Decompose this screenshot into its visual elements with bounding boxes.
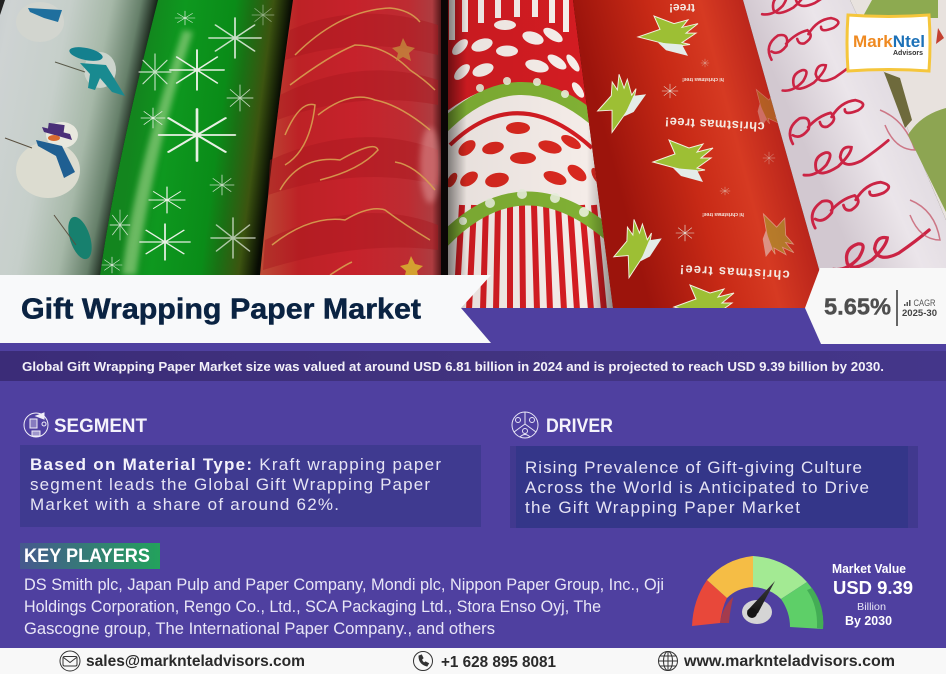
hero photo: rolls of wrapping paper (0, 0, 946, 327)
key players list (24, 576, 664, 638)
driver text box (510, 446, 918, 528)
purple background panel (0, 308, 946, 648)
icon: phone (414, 652, 432, 670)
icon: driver (512, 412, 538, 438)
key players list: Gascogne group, The International Paper Company., and others (24, 620, 495, 638)
segment text box: segment leads the Global Gift Wrapping Paper (30, 475, 430, 494)
CAGR panel (805, 268, 946, 344)
key players list: Holdings Corporation, Rengo Co., Ltd., SCA Packaging Ltd., Stora Enso Oyj, The (24, 598, 601, 616)
title: Gift Wrapping Paper Market (21, 294, 421, 326)
driver heading: DRIVER (546, 416, 613, 437)
roll: green snowflake paper (100, 0, 292, 275)
driver text box: Across the World is Anticipated to Drive (525, 478, 869, 497)
roll: red christmas tree paper: christmas tree! (664, 114, 765, 135)
footer contact bar (0, 648, 946, 674)
gauge needle (747, 581, 775, 618)
phone number: +1 628 895 8081 (441, 654, 556, 671)
gauge chart (692, 556, 823, 629)
key players badge: KEY PLAYERS (24, 546, 150, 567)
icon: small bar chart (904, 300, 910, 306)
icon: segment (24, 413, 48, 437)
CAGR value: 5.65% (824, 294, 891, 320)
icon: globe (658, 652, 678, 670)
roll: red christmas tree paper: christmas tree! (679, 262, 790, 283)
segment heading: SEGMENT (54, 416, 147, 437)
driver text box: the Gift Wrapping Paper Market (525, 498, 800, 517)
CAGR period: 2025-30 (902, 308, 937, 318)
logo: MarkNtel Advisors: MarkNtel (853, 32, 925, 51)
market value: By 2030 (845, 614, 892, 628)
panel: key players (20, 543, 664, 638)
panel: segment (20, 413, 481, 527)
roll: red christmas tree paper: hi christmas tree! (682, 76, 724, 82)
icon: email (60, 651, 80, 671)
roll: green and white paper at right edge (850, 0, 946, 220)
driver text box: Rising Prevalence of Gift-giving Culture (525, 458, 862, 477)
roll: silver snowman paper (0, 0, 158, 310)
key players list: DS Smith plc, Japan Pulp and Paper Company, Mondi plc, Nippon Paper Group, Inc., Oji (24, 576, 664, 594)
summary band (0, 351, 946, 381)
market value: Market Value (832, 562, 906, 576)
logo: MarkNtel Advisors: Advisors (893, 48, 923, 57)
summary band: Global Gift Wrapping Paper Market size was valued at around USD 6.81 billion in 2024 and is projected to reach USD 9.39 billion by 2030. (22, 360, 884, 374)
segment text box: Based on Material Type: Kraft wrapping paper (30, 455, 441, 474)
title banner (0, 275, 491, 343)
segment text box (20, 445, 481, 527)
segment text box: Market with a share of around 62%. (30, 495, 339, 514)
panel: driver (510, 412, 918, 528)
website: www.marknteladvisors.com (683, 653, 895, 670)
roll: red script paper (260, 0, 441, 275)
roll: red and white striped dotted paper (448, 0, 613, 308)
market value: USD 9.39 (833, 578, 913, 598)
logo: MarkNtel Advisors (847, 15, 930, 71)
roll: red christmas tree paper (573, 0, 820, 308)
roll: red christmas tree paper: hi christmas tree! (702, 211, 744, 217)
market value (832, 562, 913, 628)
market value: Billion (857, 601, 886, 613)
roll: white script paper (743, 0, 946, 270)
roll: red christmas tree paper: tree! (669, 1, 695, 15)
CAGR label: CAGR (914, 298, 936, 309)
email address: sales@marknteladvisors.com (86, 653, 305, 670)
